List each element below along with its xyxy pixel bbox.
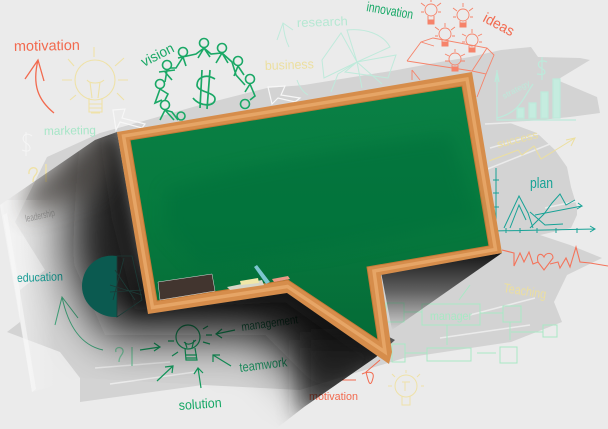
bar chart: growth sketch	[495, 57, 576, 120]
heading: motivation: motivation	[14, 38, 80, 55]
icon: yellow light bulb	[62, 47, 128, 113]
label: leadership: leadership	[24, 208, 56, 225]
eraser	[158, 274, 215, 300]
speech bubble chalkboard	[117, 72, 502, 364]
label: motivation bottom: motivation	[309, 391, 358, 403]
faint white arrows	[113, 86, 300, 130]
line chart: success	[489, 138, 575, 161]
label: business: business	[265, 56, 315, 73]
yellow question marks	[29, 164, 46, 182]
green board	[130, 86, 489, 340]
chalk pieces	[227, 265, 290, 290]
label: strategy: strategy	[501, 79, 531, 101]
org chart: manager	[386, 285, 557, 363]
shadow: right side	[381, 253, 502, 330]
label: ideas: ideas	[480, 10, 517, 40]
label: research: research	[297, 14, 348, 30]
label: marketing: marketing	[44, 123, 96, 138]
bulb and arrows: solution	[140, 325, 235, 388]
icon: bulbs in box	[407, 0, 494, 97]
frame highlight	[124, 79, 496, 352]
sketch: pie chart and arrow	[277, 23, 396, 95]
icon: yellow bulb bottom	[388, 370, 424, 405]
label: teamwork: teamwork	[239, 354, 288, 375]
pie chart: teal	[82, 256, 142, 317]
arrow: teal curved	[55, 297, 103, 350]
label: solution: solution	[178, 395, 222, 413]
label: vision: vision	[138, 40, 177, 70]
page highlight edge	[3, 213, 36, 392]
label: success: success	[496, 129, 540, 151]
wooden frame	[117, 72, 502, 364]
arrow: red curved	[25, 60, 54, 113]
heartbeat line	[502, 247, 608, 270]
shadow: page	[11, 132, 395, 422]
faint dollar icon	[22, 132, 32, 156]
label: plan: plan	[530, 175, 553, 192]
chalk wipe marks	[165, 135, 478, 268]
line chart: plan	[492, 168, 595, 233]
label: education: education	[17, 269, 63, 285]
label: manager: manager	[430, 309, 472, 323]
sketch: red motivation	[14, 38, 80, 113]
label: management: management	[240, 312, 299, 334]
page light fade	[0, 200, 41, 344]
arrow: red bottom	[342, 360, 380, 384]
brush highlights	[95, 120, 600, 384]
question and exclamation marks	[116, 347, 132, 366]
shadow of speech bubble	[11, 132, 502, 422]
label: teaching: Teaching	[503, 280, 547, 302]
icon: ring of people with dollar sign	[155, 38, 255, 120]
